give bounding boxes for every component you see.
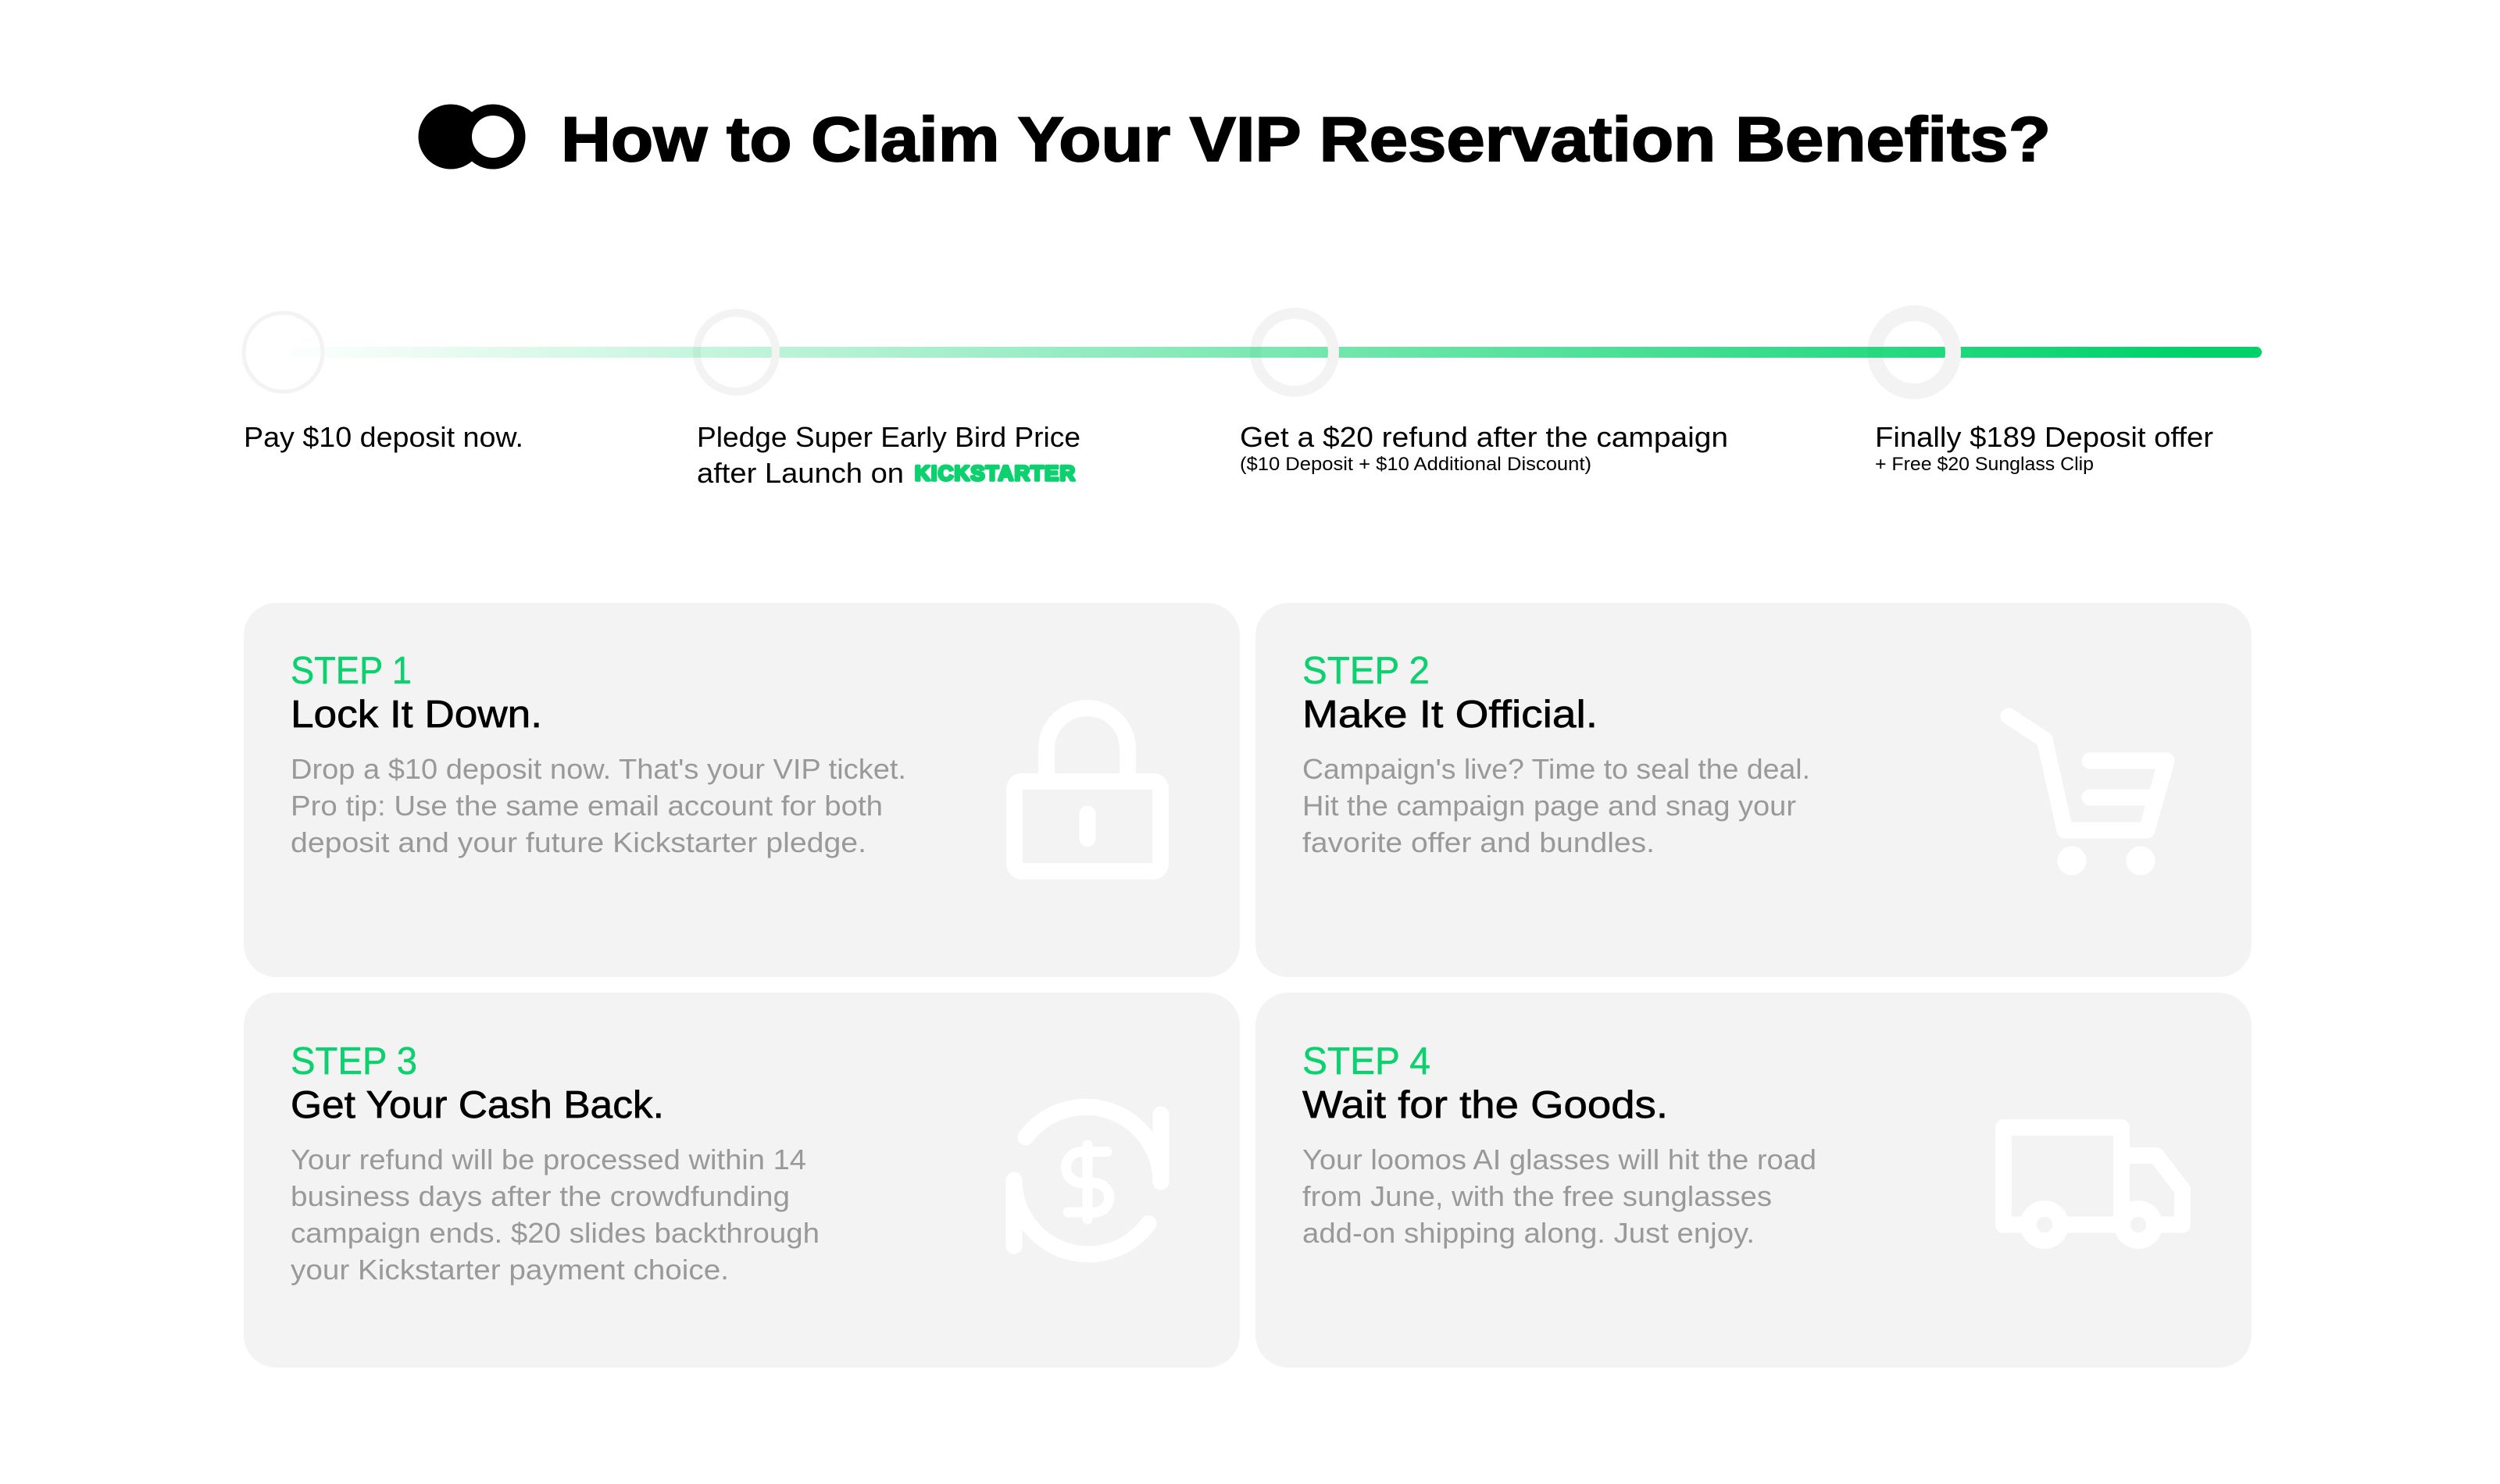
timeline progress bar <box>273 347 2262 358</box>
panel: step 1 <box>244 603 1240 977</box>
step label: STEP 1 <box>291 650 412 692</box>
step body text: Hit the campaign page and snag your <box>1302 790 1796 822</box>
icon: delivery truck <box>2003 1128 2183 1240</box>
step body text <box>1302 1143 1816 1249</box>
milestone 4 label: Finally $189 Deposit offer <box>1875 421 2213 453</box>
step label: STEP 4 <box>1302 1040 1430 1083</box>
card background <box>244 993 1240 1368</box>
milestone 2 label: Pledge Super Early Bird Price <box>697 421 1080 453</box>
card background <box>1255 603 2252 977</box>
step heading: Lock It Down. <box>291 694 542 736</box>
milestone 1 label: Pay $10 deposit now. <box>244 421 523 453</box>
card background <box>1255 993 2252 1368</box>
step body text: Your refund will be processed within 14 <box>291 1143 806 1175</box>
panel: step 2 <box>1255 603 2252 977</box>
step heading: Get Your Cash Back. <box>291 1084 664 1126</box>
step body text: Your loomos AI glasses will hit the road <box>1302 1143 1816 1175</box>
card background <box>244 603 1240 977</box>
icon: brand logo of two overlapping circles <box>419 105 525 169</box>
step heading: Wait for the Goods. <box>1302 1084 1668 1126</box>
step body text <box>291 753 906 858</box>
panel: step 4 <box>1255 993 2252 1368</box>
milestone 3 label <box>1240 421 1728 475</box>
step body text: Pro tip: Use the same email account for both <box>291 790 883 822</box>
step body text: campaign ends. $20 slides backthrough <box>291 1217 820 1249</box>
milestone 2 label <box>697 421 1080 489</box>
milestone 2 label: after Launch on <box>697 457 904 489</box>
step body text: add-on shipping along. Just enjoy. <box>1302 1217 1755 1249</box>
step label: STEP 2 <box>1302 650 1430 692</box>
step body text <box>1302 753 1810 858</box>
step heading: Make It Official. <box>1302 694 1598 736</box>
milestone 3 label: Get a $20 refund after the campaign <box>1240 421 1728 453</box>
step body text: Campaign's live? Time to seal the deal. <box>1302 753 1810 785</box>
milestone 4 label: + Free $20 Sunglass Clip <box>1875 454 2094 475</box>
step label: STEP 3 <box>291 1040 417 1083</box>
title block <box>419 105 2051 175</box>
milestone 3 label: ($10 Deposit + $10 Additional Discount) <box>1240 454 1591 475</box>
step body text: favorite offer and bundles. <box>1302 826 1655 858</box>
step body text: business days after the crowdfunding <box>291 1180 790 1212</box>
step body text: from June, with the free sunglasses <box>1302 1180 1772 1212</box>
step body text: your Kickstarter payment choice. <box>291 1254 729 1286</box>
kickstarter wordmark: KICKSTARTER <box>915 462 1075 485</box>
timeline <box>244 312 2262 489</box>
step body text: Drop a $10 deposit now. That's your VIP ticket. <box>291 753 906 785</box>
timeline rings, front half overlapping the bar <box>283 312 1953 392</box>
step body text: deposit and your future Kickstarter pledge. <box>291 826 866 858</box>
panel: step 3 <box>244 993 1240 1368</box>
step body text <box>291 1143 820 1286</box>
icon: shopping cart <box>2009 716 2166 875</box>
icon: dollar refund cycle <box>1014 1107 1161 1254</box>
title: How to Claim Your VIP Reservation Benefits? <box>561 105 2051 175</box>
timeline rings, back half <box>244 312 1953 392</box>
milestone 4 label <box>1875 421 2213 475</box>
icon: padlock <box>1006 708 1169 879</box>
